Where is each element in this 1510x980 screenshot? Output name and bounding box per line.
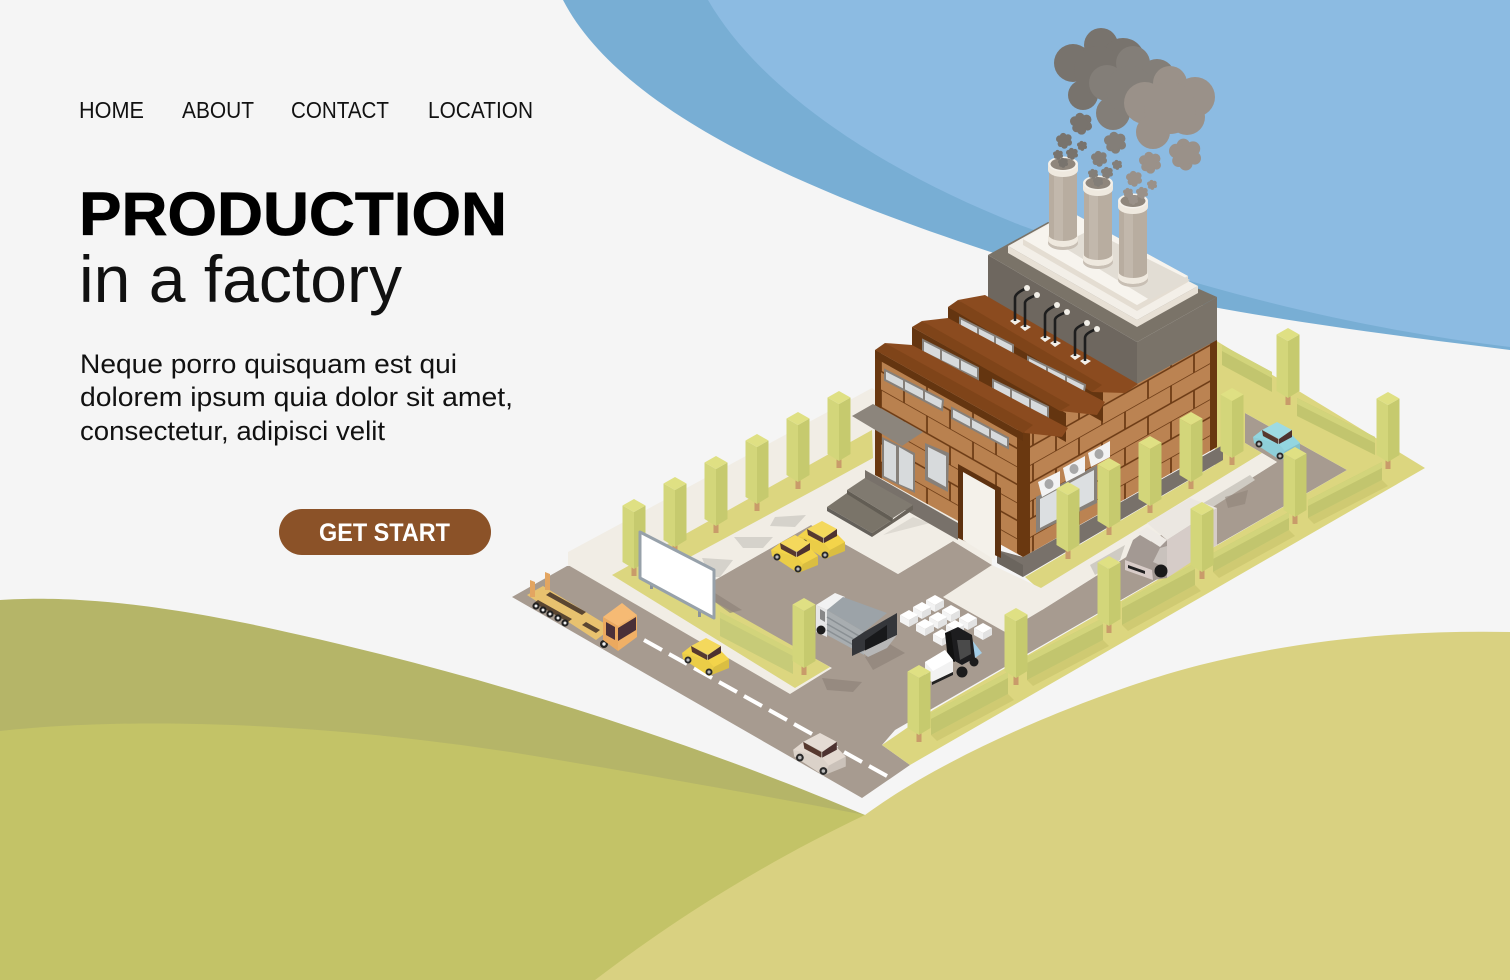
- navigation menu: CONTACT: [291, 97, 389, 123]
- small puffs light: [1123, 139, 1201, 205]
- main door: [958, 464, 1001, 560]
- title: [79, 180, 507, 316]
- back clerestory windows: [960, 318, 1085, 397]
- roof pipes: [1010, 285, 1100, 365]
- box truck: [816, 593, 897, 657]
- light cloud: [1124, 66, 1215, 149]
- flatbed truck: [527, 572, 637, 651]
- wall corner posts: [875, 323, 1217, 557]
- yellow car on road: [682, 638, 729, 676]
- billboard: [640, 532, 714, 618]
- button: get start: GET START: [319, 519, 450, 547]
- front green hill: [0, 723, 865, 980]
- stacked white boxes: [900, 595, 992, 646]
- right hedges: [931, 462, 1388, 741]
- right khaki hill: [595, 632, 1510, 980]
- right brick wall: [1023, 323, 1217, 557]
- ground: pale sidewalks: [568, 388, 992, 694]
- body text: [80, 349, 513, 446]
- back olive hill: [0, 599, 865, 980]
- blue car: [1253, 422, 1300, 460]
- back hedges: [1222, 345, 1375, 455]
- front ridge: [875, 343, 1068, 441]
- right wall window: [1036, 465, 1097, 533]
- dark blue sky wave: [563, 0, 1510, 350]
- roof windows wall and ridges: [875, 295, 1138, 442]
- title: PRODUCTION: [79, 180, 507, 248]
- road dashes: [644, 640, 887, 776]
- middle clerestory windows: [923, 340, 1048, 418]
- ground: road and parking lot: [512, 413, 1347, 798]
- entrance glass door: [882, 437, 915, 493]
- navigation menu: ABOUT: [182, 97, 254, 123]
- chimneys: [1048, 156, 1148, 287]
- plinth: [865, 445, 1223, 577]
- white roof pad: [1008, 212, 1198, 327]
- trees along the building: [1056, 388, 1244, 559]
- back trees: [1276, 328, 1400, 469]
- entrance canopy: [852, 404, 923, 446]
- ground shadows: [702, 475, 1255, 692]
- grey upper block: [988, 222, 1217, 384]
- factory site isometric illustration: [512, 28, 1425, 798]
- trees along the right fence: [908, 447, 1306, 742]
- body text: Neque porro quisquam est qui: [80, 349, 457, 379]
- navigation menu: LOCATION: [428, 97, 533, 123]
- navigation menu: [79, 97, 533, 123]
- air conditioners: [1038, 441, 1110, 497]
- navigation menu: HOME: [79, 97, 144, 123]
- ground: walkway: [943, 453, 1277, 632]
- delivery van: [1125, 498, 1217, 580]
- back ridge: [948, 295, 1138, 422]
- body text: consectetur, adipisci velit: [80, 416, 386, 446]
- smoke: [1053, 28, 1215, 205]
- forklift: [925, 627, 982, 685]
- dark cloud: [1054, 28, 1145, 110]
- title: in a factory: [79, 242, 402, 316]
- lot tree: [792, 598, 816, 675]
- left tree row: [622, 391, 850, 576]
- middle ridge: [912, 318, 1105, 442]
- stairs: [827, 478, 913, 537]
- body text: dolorem ipsum quia dolor sit amet,: [80, 382, 513, 412]
- side window: [925, 443, 949, 492]
- beige car on road: [793, 733, 846, 776]
- button: get start: [279, 509, 491, 555]
- small puffs middle: [1088, 132, 1126, 187]
- ground: lawn around right side: [882, 340, 1425, 765]
- parked yellow cars: [771, 521, 845, 573]
- middle cloud: [1089, 46, 1175, 130]
- left brick wall: [875, 350, 1023, 557]
- small puffs: [1053, 113, 1092, 168]
- lot hedge: [720, 612, 793, 674]
- ground: lawn under tree row: [612, 430, 873, 688]
- light blue sky wave: [708, 0, 1510, 347]
- factory building: [827, 156, 1223, 577]
- upper windows on left wall: [885, 370, 1008, 448]
